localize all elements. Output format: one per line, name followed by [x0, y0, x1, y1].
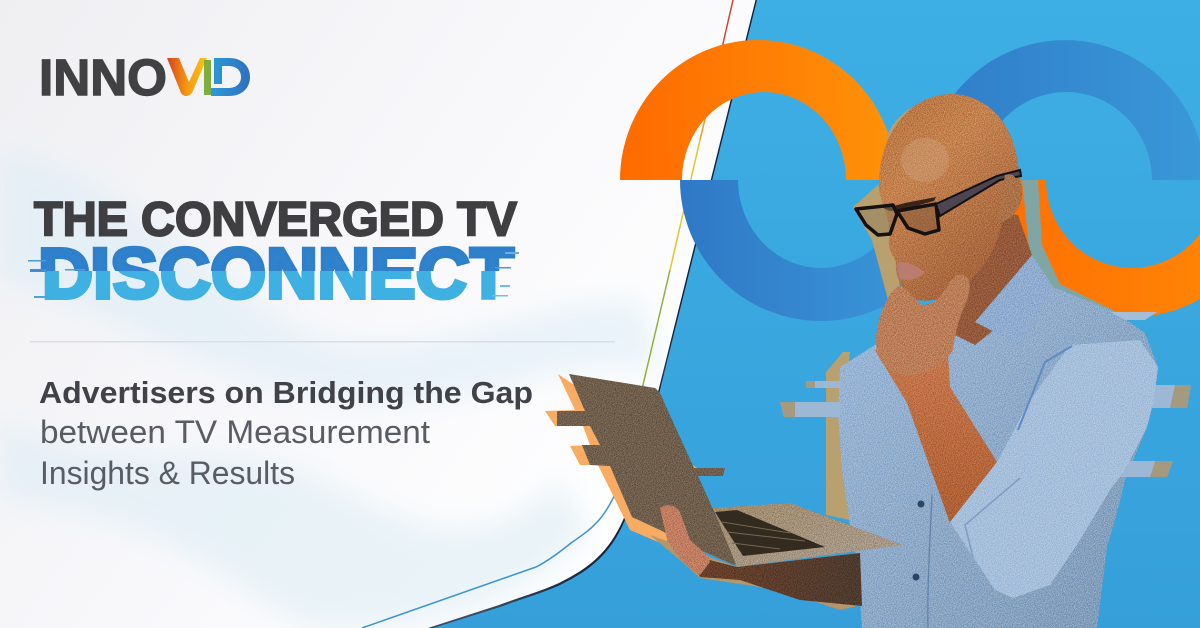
shirt [838, 255, 1158, 628]
logo: Innovid [39, 49, 250, 106]
logo V [167, 58, 207, 96]
shirt glitch bars [780, 381, 1191, 477]
eyebrows [876, 197, 936, 211]
logo: Innovid: INNO [39, 49, 167, 106]
interlocking rings [620, 39, 1200, 321]
panel: white curved left panel [0, 0, 757, 628]
sleeve and upper arm [950, 340, 1158, 598]
head [879, 94, 1022, 301]
shirt fold [1018, 346, 1072, 430]
background waves [0, 150, 660, 628]
keyboard [715, 510, 825, 556]
mouth [897, 262, 925, 280]
logo D [211, 58, 250, 96]
glasses [856, 170, 1021, 235]
title: Disconnect glitch word: DISCONNECT [38, 235, 514, 314]
subtitle: Advertisers on Bridging the Gap [39, 375, 533, 410]
title: The Converged TV: THE CONVERGED TV [34, 194, 517, 246]
laptop base [713, 503, 903, 567]
shirt placket and buttons [912, 495, 932, 628]
ring: dark blue upper right [954, 40, 1200, 180]
neck [935, 210, 1033, 345]
subtitle: Insights & Results [40, 455, 295, 491]
title: Disconnect glitch word [28, 246, 519, 300]
head highlight [901, 138, 949, 182]
underarm and hand [650, 535, 862, 610]
subtitle: between TV Measurement [40, 414, 430, 450]
logo I [204, 60, 211, 95]
ring: orange lower right [1014, 180, 1200, 316]
ring: dark blue lower left [680, 180, 902, 321]
divider [30, 341, 615, 342]
title: Disconnect glitch word: DISCONNECT [42, 235, 510, 314]
fist with finger [876, 275, 970, 375]
collar [975, 255, 1053, 345]
hand fingers [660, 505, 710, 575]
neck side shadow [1022, 180, 1125, 316]
sleeve cuff fold [965, 478, 1020, 557]
accent line: red to green to blue [362, 0, 733, 628]
ear [998, 174, 1020, 220]
laptop orange shadow [545, 374, 700, 545]
forearm [875, 340, 997, 523]
ring: orange upper left [620, 40, 890, 180]
illustration: person with laptop [545, 94, 1191, 628]
person tan offset shadow [826, 97, 945, 520]
subtitle [39, 375, 533, 491]
laptop lid [557, 374, 737, 565]
shoulder glitch sliver [1110, 312, 1157, 320]
